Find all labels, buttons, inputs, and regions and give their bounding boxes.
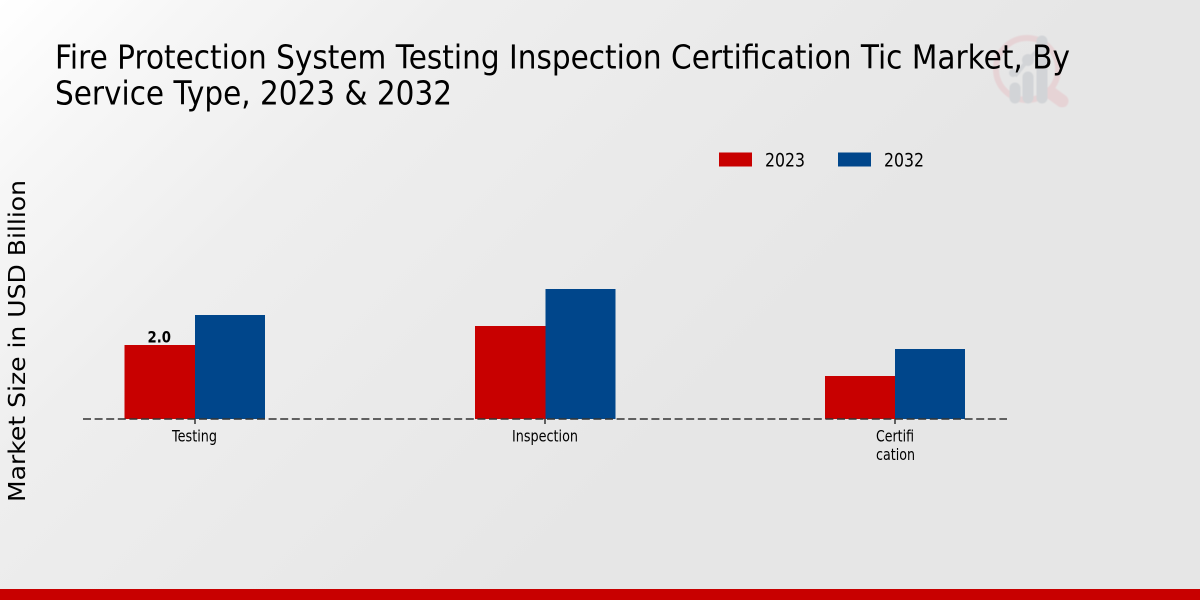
category label: testing: Testing xyxy=(171,426,217,446)
category label: certification xyxy=(876,426,915,464)
y axis label: Market Size in USD Billion xyxy=(3,180,31,502)
category label: inspection: Inspection xyxy=(512,426,578,446)
watermark logo icon xyxy=(996,38,1062,101)
title xyxy=(55,38,1070,112)
bars: certification xyxy=(825,349,965,419)
category label: certification: Certifi xyxy=(876,426,914,446)
baseline axis xyxy=(83,419,1007,424)
category label: certification: cation xyxy=(876,445,915,464)
value label: 2.0 xyxy=(148,328,171,347)
bars: inspection xyxy=(475,289,616,419)
title: Service Type, 2023 & 2032 xyxy=(55,74,452,112)
title: Fire Protection System Testing Inspection Certification Tic Market, By xyxy=(55,38,1070,76)
bars: testing xyxy=(124,315,265,419)
footer bar xyxy=(0,589,1200,600)
bar chart xyxy=(83,289,1007,464)
legend xyxy=(719,150,924,172)
legend: 2023 xyxy=(765,150,805,172)
legend: 2032 xyxy=(884,150,924,172)
